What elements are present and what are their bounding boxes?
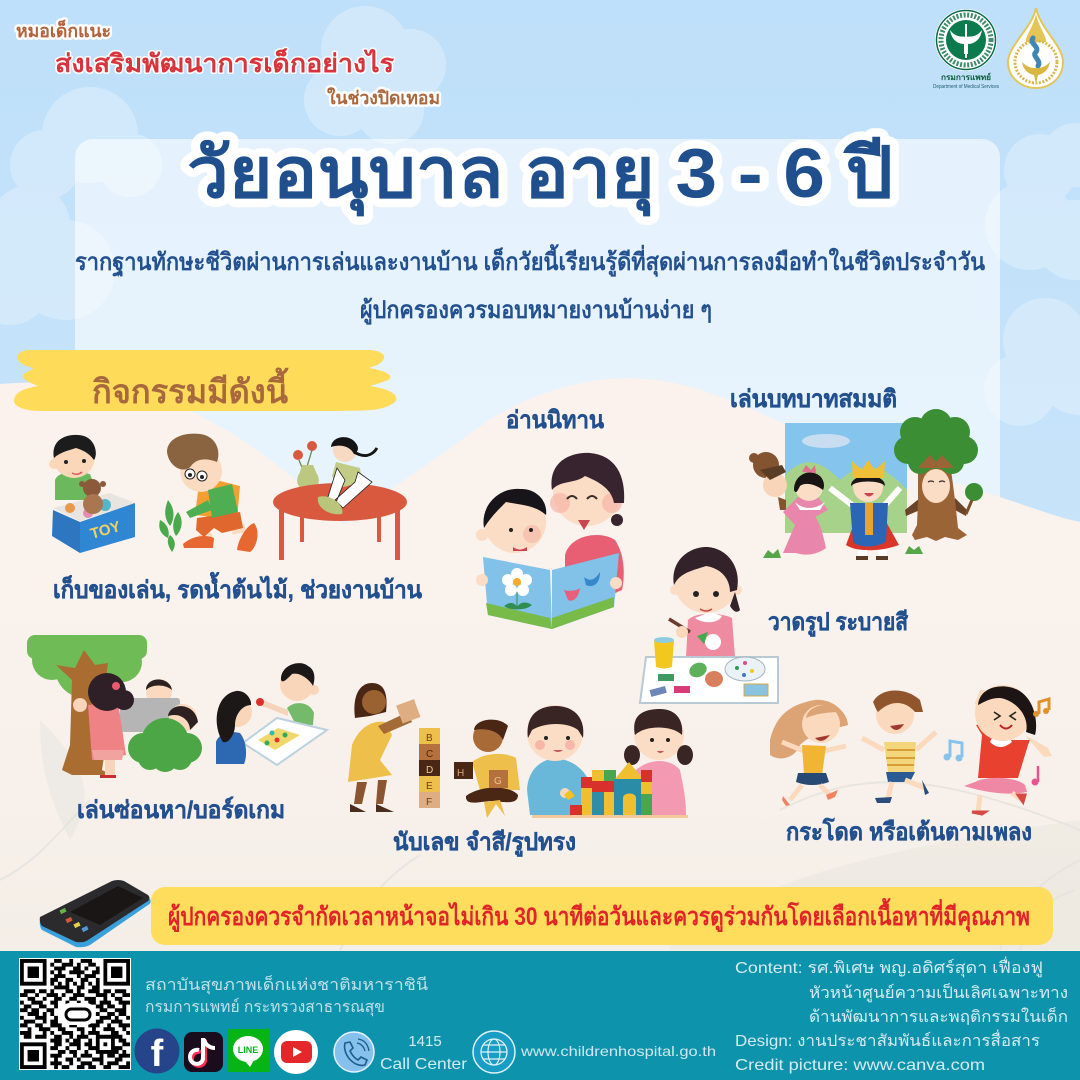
- illustration: girl and boy with letter blocks: B: [426, 733, 433, 744]
- illustration: girl and boy with letter blocks: E: [426, 781, 433, 792]
- header: during school break: ในช่วงปิดเทอม: [327, 87, 440, 108]
- label: tidy toys, water plants, housework: เก็บของเล่น, รดน้ำต้นไม้, ช่วยงานบ้าน: [53, 571, 423, 604]
- credits: [735, 956, 1068, 1074]
- illustration: boy packing toys: [49, 435, 135, 553]
- credits: ด้านพัฒนาการและพฤติกรรมในเด็ก: [809, 1006, 1068, 1026]
- credits: Design: งานประชาสัมพันธ์และการสื่อสาร: [735, 1029, 1040, 1050]
- footer panel: [0, 951, 1080, 1080]
- header: how to promote child development: ส่งเสริมพัฒนาการเด็กอย่างไร: [55, 48, 395, 78]
- illustration: hide and seek: [27, 635, 202, 778]
- activities banner: กิจกรรมมีดังนี้: [92, 367, 289, 410]
- icon: phone call: [334, 1032, 374, 1072]
- text: institute name: สถาบันสุขภาพเด็กแห่งชาติมหาราชินี: [145, 974, 428, 995]
- label: draw and paint: วาดรูป ระบายสี: [768, 609, 908, 637]
- label: hide and seek / board game: เล่นซ่อนหา/บอร์ดเกม: [77, 796, 285, 824]
- header: doctor advises: หมอเด็กแนะ: [16, 19, 111, 41]
- subtitle line 1: รากฐานทักษะชีวิตผ่านการเล่นและงานบ้าน เด็กวัยนี้เรียนรู้ดีที่สุดผ่านการลงมือทำในชีวิตประจำวัน: [75, 243, 986, 278]
- credits: หัวหน้าศูนย์ความเป็นเลิศเฉพาะทาง: [809, 982, 1068, 1003]
- illustration: children building toy castle: [527, 705, 693, 818]
- illustration: mother and child reading: [476, 453, 624, 629]
- icon: line: [227, 1029, 269, 1072]
- text: 1415: 1415: [408, 1033, 442, 1050]
- text: department and ministry: กรมการแพทย์ กระทรวงสาธารณสุข: [145, 997, 385, 1017]
- label: role play: เล่นบทบาทสมมติ: [730, 386, 897, 413]
- label: read stories: อ่านนิทาน: [506, 407, 605, 434]
- illustration: children dancing to music: [770, 685, 1052, 814]
- icon: facebook: f: [151, 1033, 164, 1075]
- label: jump or dance to music: กระโดด หรือเต้นตามเพลง: [786, 817, 1032, 846]
- icon: smartphone: [40, 880, 151, 947]
- illustration: girl wiping table: [273, 437, 407, 560]
- screen time warning bar: [151, 887, 1053, 945]
- illustration: girl and boy with letter blocks: C: [426, 749, 433, 760]
- text: call center: Call Center: [380, 1056, 468, 1073]
- illustration: boy packing toys: TOY: [88, 518, 122, 543]
- label: counting, colours and shapes: นับเลข จำสี/รูปทรง: [393, 829, 576, 857]
- credits: Content: รศ.พิเศษ พญ.อดิศร์สุดา เฟื่องฟู: [735, 956, 1043, 978]
- illustration: board game children: [216, 663, 327, 765]
- logo: department of medical services: Department of Medical Services: [933, 84, 999, 90]
- credits: Credit picture: www.canva.com: [735, 1057, 985, 1074]
- icon: tiktok: [184, 1032, 223, 1072]
- illustration: girl and boy with letter blocks: F: [426, 797, 432, 808]
- illustration: girl and boy with letter blocks: D: [426, 765, 433, 776]
- illustration: girl and boy with letter blocks: [348, 683, 520, 818]
- icon: facebook: [134, 1028, 180, 1075]
- illustration: girl and boy with letter blocks: G: [494, 776, 502, 787]
- icon: line: LINE: [238, 1045, 258, 1055]
- illustration: boy watering plants: [159, 434, 257, 552]
- text: website: www.childrenhospital.go.th: [520, 1043, 716, 1059]
- logo: department of medical services: กรมการแพทย์: [941, 72, 991, 82]
- logo: department of medical services: [933, 9, 999, 90]
- icon: globe: [473, 1031, 515, 1073]
- illustration: girl and boy with letter blocks: H: [457, 768, 464, 779]
- main title: วัยอนุบาล อายุ 3 - 6 ปี: [187, 134, 893, 217]
- icon: youtube: [274, 1030, 318, 1074]
- QR code: [19, 958, 131, 1070]
- activities banner: [14, 350, 396, 411]
- illustration: role play children and tree: [749, 409, 983, 560]
- illustration: girl painting eggs: [640, 547, 778, 703]
- logo: royal emblem teardrop: [1008, 8, 1063, 88]
- subtitle line 2: ผู้ปกครองควรมอบหมายงานบ้านง่าย ๆ: [360, 297, 712, 325]
